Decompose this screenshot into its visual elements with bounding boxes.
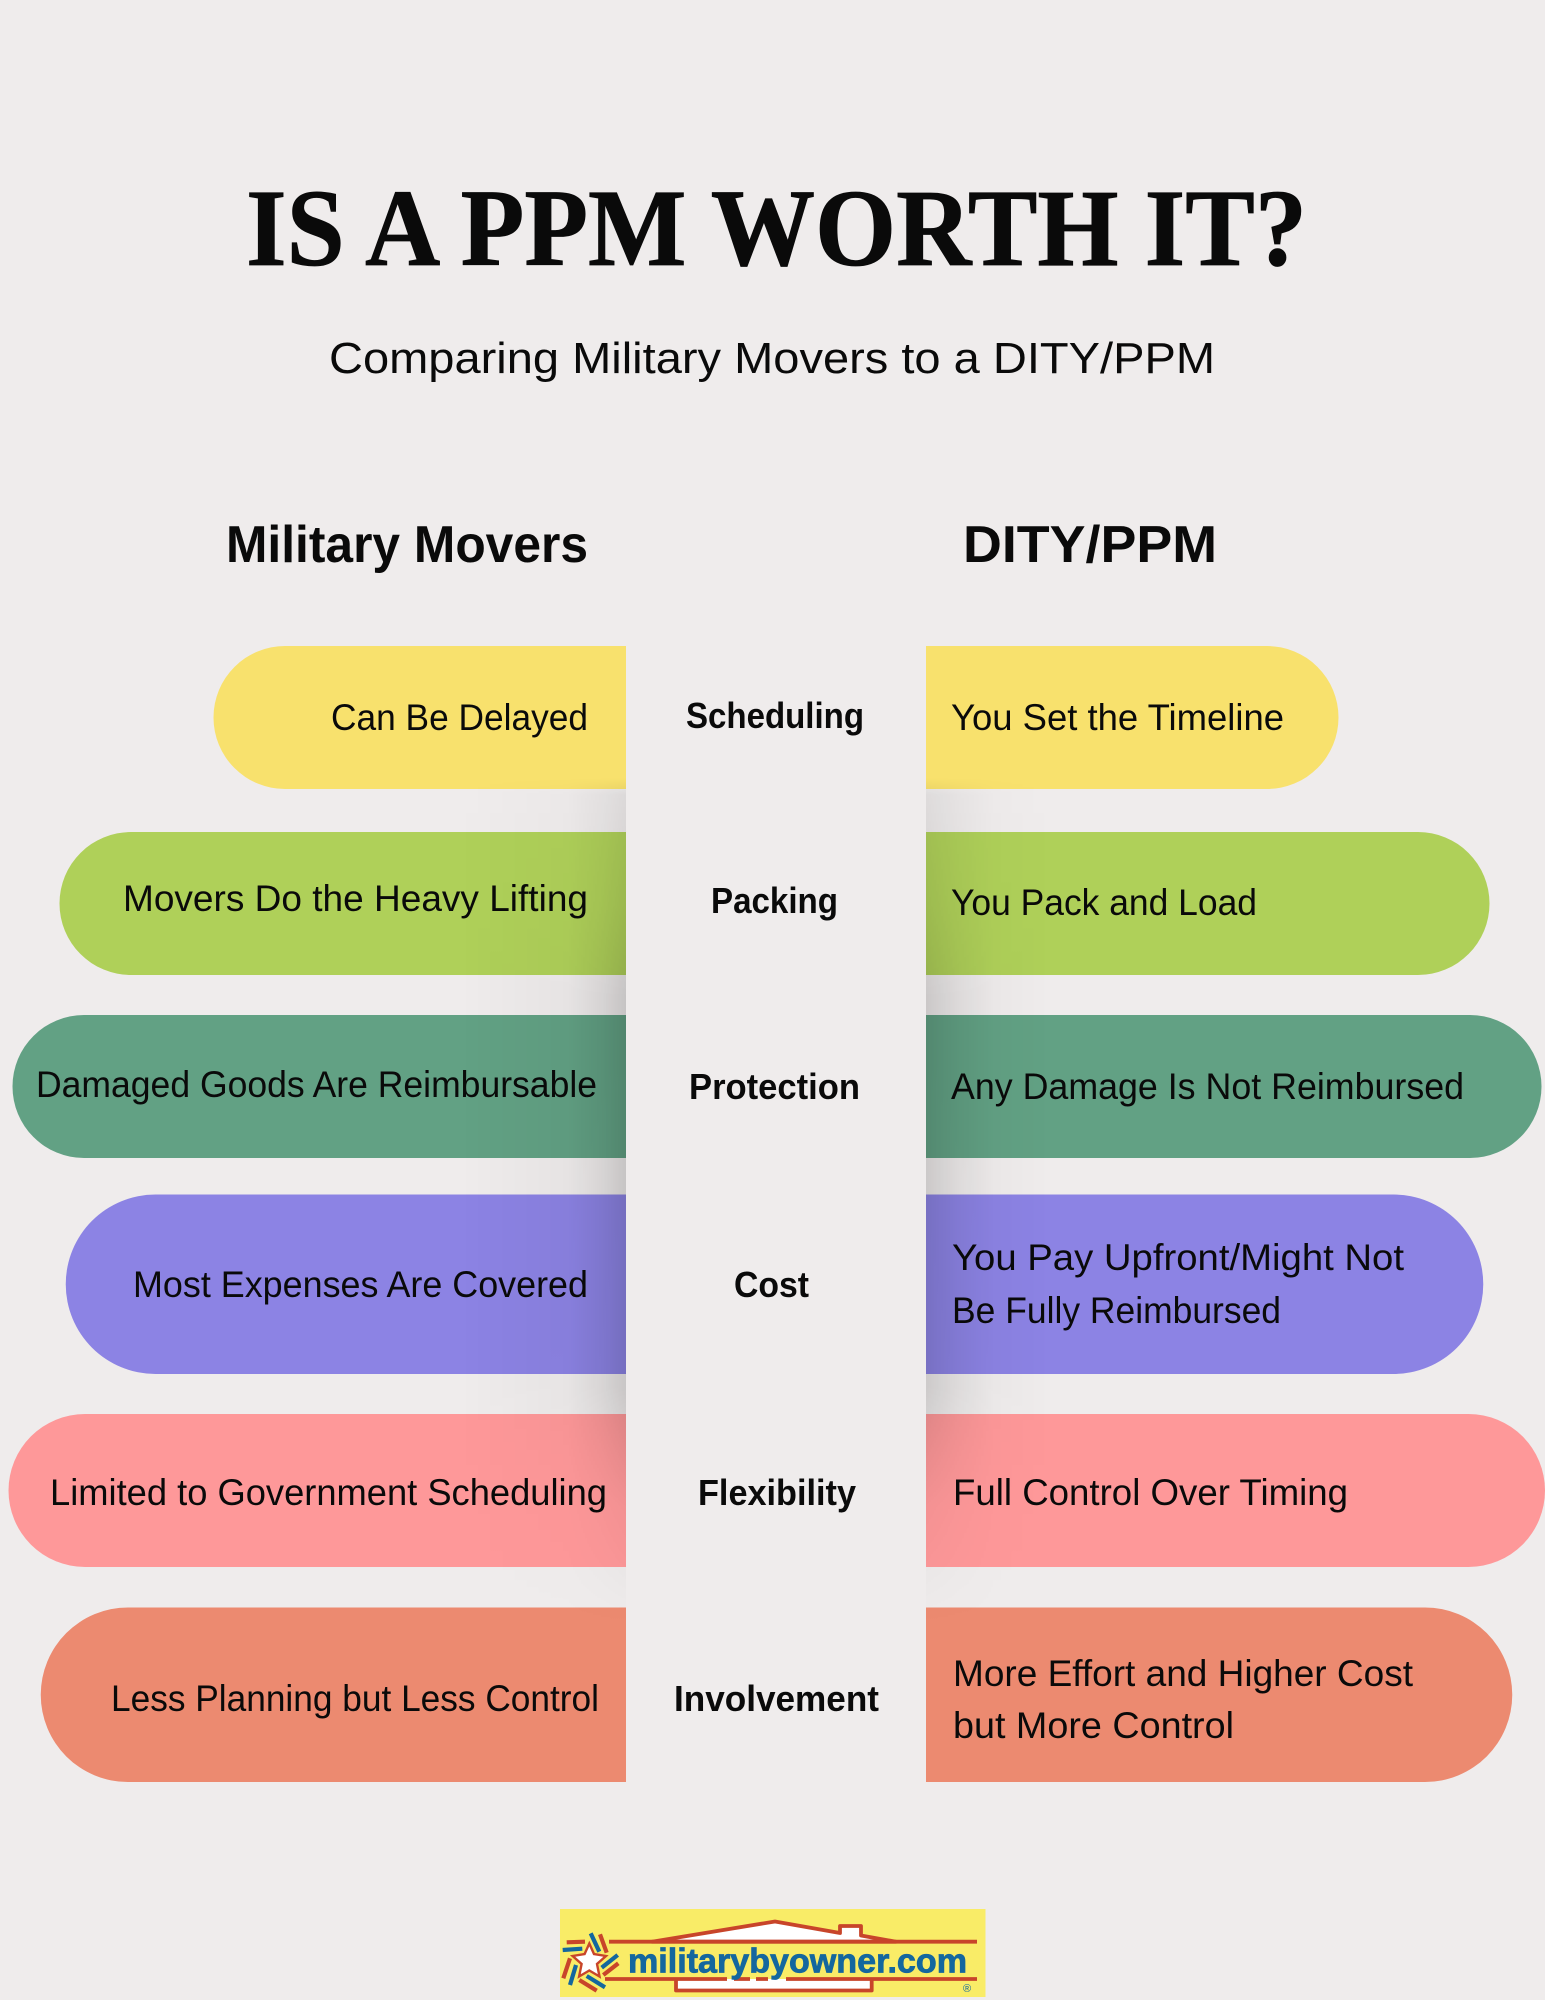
right pill: You Pay Upfront/Might Not Be Fully Reimbursed: You Pay Upfront/Might Not — [952, 1237, 1405, 1278]
right pill: You Pay Upfront/Might Not Be Fully Reimbursed — [926, 1194, 1483, 1374]
right pill: Any Damage Is Not Reimbursed: Any Damage Is Not Reimbursed — [951, 1066, 1464, 1107]
right pill: More Effort and Higher Cost but More Control — [926, 1608, 1512, 1782]
row: Involvement — [41, 1608, 1512, 1782]
left pill: Most Expenses Are Covered: Most Expenses Are Covered — [133, 1264, 588, 1305]
right pill: Full Control Over Timing: Full Control Over Timing — [953, 1472, 1348, 1513]
right pill: You Set the Timeline — [926, 646, 1338, 789]
category label: Cost: Cost — [734, 1264, 809, 1305]
category label: Scheduling: Scheduling — [686, 695, 864, 736]
left pill: Less Planning but Less Control: Less Planning but Less Control — [111, 1678, 599, 1719]
logo: militarybyowner.com — [560, 1909, 986, 1997]
registered mark: ® — [963, 1983, 971, 1995]
right pill: You Pay Upfront/Might Not Be Fully Reimbursed: Be Fully Reimbursed — [952, 1290, 1281, 1331]
logo wordmark: militarybyowner.com — [628, 1942, 967, 1980]
subtitle: Comparing Military Movers to a DITY/PPM — [329, 334, 1215, 383]
left pill: Limited to Government Scheduling — [9, 1414, 626, 1567]
row: Packing — [60, 832, 1490, 975]
category label: Packing: Packing — [711, 880, 838, 921]
left pill: Limited to Government Scheduling: Limited to Government Scheduling — [50, 1472, 607, 1513]
right pill: You Pack and Load — [926, 832, 1490, 975]
row: Cost — [66, 1194, 1483, 1374]
right pill: Any Damage Is Not Reimbursed — [926, 1015, 1542, 1158]
title: IS A PPM WORTH IT? — [246, 167, 1307, 289]
category label: Flexibility: Flexibility — [698, 1472, 856, 1513]
right pill: More Effort and Higher Cost but More Control: More Effort and Higher Cost — [953, 1653, 1414, 1694]
left pill: Most Expenses Are Covered — [66, 1194, 626, 1374]
right pill: You Pack and Load: You Pack and Load — [951, 882, 1257, 923]
right pill: More Effort and Higher Cost but More Control: but More Control — [953, 1705, 1234, 1746]
column heading: Military Movers: Military Movers — [226, 516, 588, 574]
row: Protection — [13, 1015, 1542, 1158]
left pill: Can Be Delayed — [214, 646, 626, 789]
row: Scheduling — [214, 646, 1338, 789]
right pill: Full Control Over Timing — [926, 1414, 1545, 1567]
left pill: Movers Do the Heavy Lifting — [60, 832, 626, 975]
left pill: Less Planning but Less Control — [41, 1608, 626, 1782]
category label: Involvement: Involvement — [674, 1678, 879, 1719]
left pill: Movers Do the Heavy Lifting: Movers Do the Heavy Lifting — [123, 878, 588, 919]
left pill: Damaged Goods Are Reimbursable: Damaged Goods Are Reimbursable — [36, 1064, 597, 1105]
icon: house outline — [605, 1922, 977, 1990]
right pill: You Set the Timeline: You Set the Timeline — [951, 697, 1284, 738]
category label: Protection: Protection — [689, 1066, 860, 1107]
left pill: Damaged Goods Are Reimbursable — [13, 1015, 626, 1158]
left pill: Can Be Delayed: Can Be Delayed — [331, 697, 588, 738]
center column shadow — [563, 785, 986, 1538]
column heading: DITY/PPM: DITY/PPM — [963, 516, 1217, 574]
icon: star with stripes — [563, 1933, 618, 1991]
row: Flexibility — [9, 1414, 1545, 1567]
